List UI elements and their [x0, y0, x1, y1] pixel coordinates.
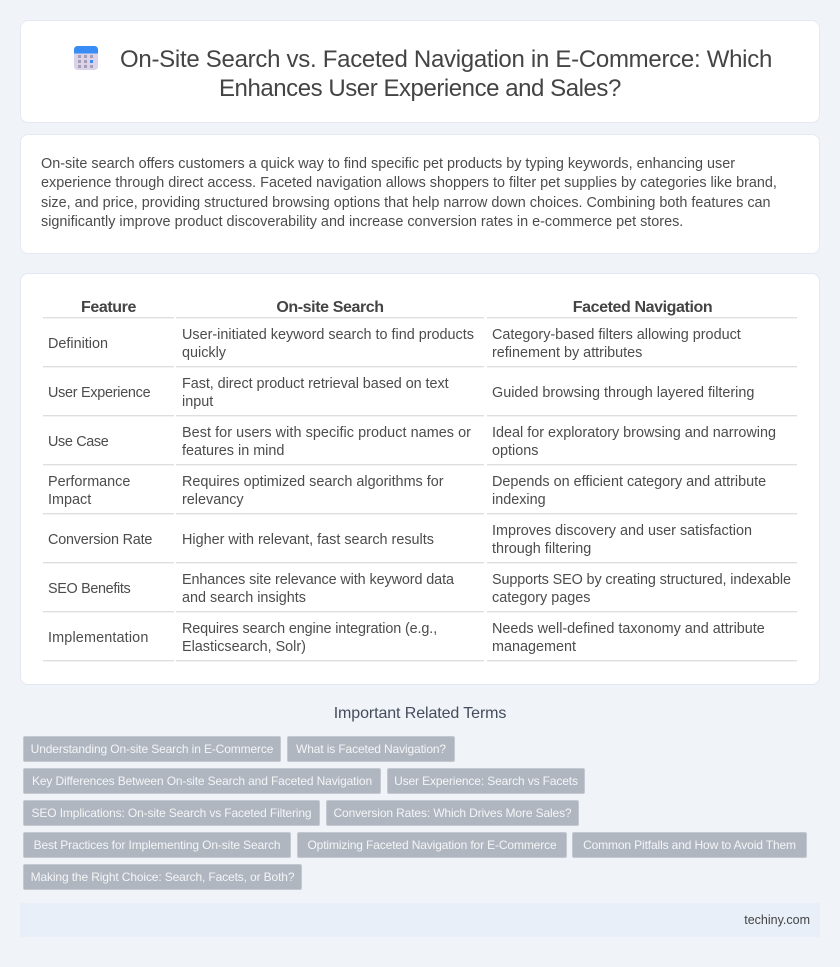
tag [297, 832, 567, 858]
icon: calendar grid [74, 46, 98, 70]
row: Definition: User-initiated keyword search to find products [182, 327, 474, 343]
row: Performance Impact: indexing [492, 492, 546, 508]
text block: intro: significantly improve product discoverability and increase conversion rates in e-commerce pet stores. [41, 214, 683, 230]
row: User Experience: input [182, 394, 213, 410]
footer credit: techiny.com [744, 913, 810, 927]
row: User Experience [48, 376, 754, 410]
table: feature comparison [43, 299, 797, 662]
row: Definition: refinement by attributes [492, 345, 642, 361]
tag [387, 768, 585, 794]
row: SEO Benefits: SEO Benefits [48, 581, 130, 597]
title [120, 46, 772, 102]
row: SEO Benefits: category pages [492, 590, 590, 606]
tag: What is Faceted Navigation? [296, 742, 446, 756]
row: Performance Impact [48, 474, 766, 508]
row: User Experience: Guided browsing through layered filtering [492, 385, 754, 401]
text block: intro: size, and price, providing structured browsing options that help narrow down choices. Combining both features can [41, 195, 771, 211]
row: Performance Impact: relevancy [182, 492, 244, 508]
tag [572, 832, 807, 858]
row: Definition [48, 327, 741, 361]
footer bar [20, 903, 820, 937]
row: Conversion Rate: Conversion Rate [48, 532, 152, 548]
text block: intro: experience through direct access. Faceted navigation allows shoppers to filter pet supplies by categories like brand, [41, 175, 777, 191]
row: Implementation: Implementation [48, 630, 148, 646]
row: Use Case: Best for users with specific product names or [182, 425, 471, 441]
row: Use Case: Ideal for exploratory browsing and narrowing [492, 425, 776, 441]
tag [326, 800, 579, 826]
row: Implementation [48, 621, 765, 655]
row: Definition: Category-based filters allowing product [492, 327, 741, 343]
row: Implementation: management [492, 639, 576, 655]
tag: Conversion Rates: Which Drives More Sales? [334, 806, 571, 820]
text block: intro [41, 156, 777, 230]
table header [81, 299, 712, 316]
tag: Key Differences Between On-site Search and Faceted Navigation [32, 774, 372, 788]
title: On-Site Search vs. Faceted Navigation in E-Commerce: Which [120, 46, 772, 73]
row: Conversion Rate: through filtering [492, 541, 591, 557]
panel: title header [20, 20, 820, 123]
row: Conversion Rate: Higher with relevant, fast search results [182, 532, 434, 548]
tag: Understanding On-site Search in E-Commerce [31, 742, 273, 756]
row: Use Case: options [492, 443, 538, 459]
row: SEO Benefits: Supports SEO by creating structured, indexable [492, 572, 791, 588]
row: Definition: quickly [182, 345, 226, 361]
panel: intro paragraph [20, 134, 820, 254]
tag: SEO Implications: On-site Search vs Faceted Filtering [32, 806, 311, 820]
tag: Optimizing Faceted Navigation for E-Commerce [307, 838, 557, 852]
title: Enhances User Experience and Sales? [219, 75, 621, 102]
tag: Making the Right Choice: Search, Facets, or Both? [31, 870, 294, 884]
tag: User Experience: Search vs Facets [394, 774, 578, 788]
row: Performance Impact: Requires optimized search algorithms for [182, 474, 444, 490]
row: Definition: Definition [48, 336, 108, 352]
row: Use Case [48, 425, 776, 459]
tag list: related terms [23, 736, 807, 890]
tag [23, 736, 281, 762]
tag [23, 832, 291, 858]
tag [23, 800, 320, 826]
row: Use Case: Use Case [48, 434, 108, 450]
row: SEO Benefits: and search insights [182, 590, 306, 606]
tag: Common Pitfalls and How to Avoid Them [583, 838, 796, 852]
row: Performance Impact: Depends on efficient category and attribute [492, 474, 766, 490]
heading: Important Related Terms: Important Related Terms [334, 705, 506, 722]
row: SEO Benefits: Enhances site relevance with keyword data [182, 572, 454, 588]
row: SEO Benefits [48, 572, 791, 606]
table header: Faceted Navigation [573, 299, 712, 316]
row: User Experience: Fast, direct product retrieval based on text [182, 376, 449, 392]
text block: intro: On-site search offers customers a quick way to find specific pet products by typing keywords, enhancing user [41, 156, 735, 172]
tag: Best Practices for Implementing On-site Search [34, 838, 280, 852]
row: Implementation: Needs well-defined taxonomy and attribute [492, 621, 765, 637]
panel: comparison table [20, 273, 820, 685]
row: Implementation: Requires search engine integration (e.g., [182, 621, 437, 637]
row: Conversion Rate: Improves discovery and user satisfaction [492, 523, 752, 539]
row: Conversion Rate [48, 523, 752, 557]
row: Performance Impact: Performance [48, 474, 130, 490]
row: Use Case: features in mind [182, 443, 284, 459]
row: Implementation: Elasticsearch, Solr) [182, 639, 306, 655]
tag [23, 864, 302, 890]
tag [23, 768, 381, 794]
row: Performance Impact: Impact [48, 492, 91, 508]
tag [287, 736, 455, 762]
table header: On-site Search [276, 299, 384, 316]
table header: Feature [81, 299, 136, 316]
row: User Experience: User Experience [48, 385, 150, 401]
